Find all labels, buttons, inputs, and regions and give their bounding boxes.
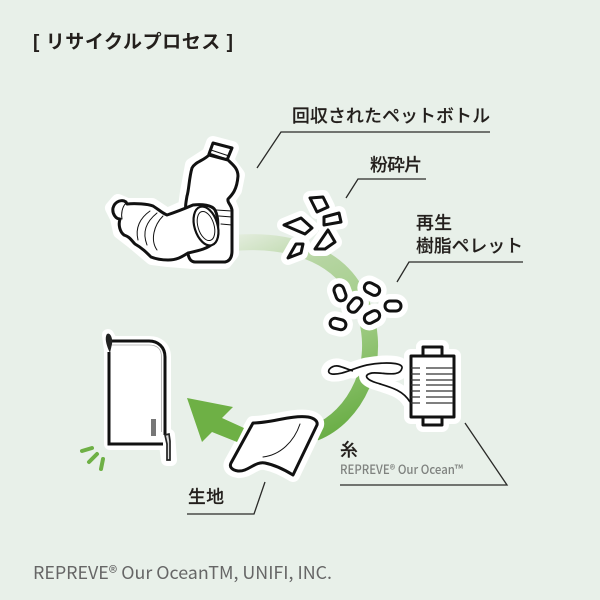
- label: yarn brand: REPREVE® Our Ocean™: [340, 459, 463, 478]
- label: pellets: 樹脂ペレット: [416, 232, 523, 258]
- icon: plastic bottles: [112, 143, 238, 262]
- label: fabric: 生地: [188, 483, 224, 509]
- upright bottle: [186, 143, 238, 262]
- leader line: collected bottles: [257, 132, 490, 168]
- leader line: flakes: [346, 179, 426, 198]
- label: flakes: 粉砕片: [370, 151, 422, 177]
- zipper pull bottom: [165, 434, 170, 460]
- icon: yarn spool: [329, 347, 454, 425]
- icon: pellets: [329, 281, 401, 331]
- pouch body: [109, 341, 165, 444]
- title: [ リサイクルプロセス ]: [33, 31, 233, 53]
- label: pellets: [416, 209, 523, 258]
- icon: fabric: [230, 417, 317, 475]
- leader line: yarn: [340, 423, 507, 485]
- icon: zipper pouch: [106, 334, 171, 460]
- label: yarn: 糸: [340, 436, 358, 462]
- lying bottle: [113, 201, 223, 260]
- recycling ring arrow: [232, 242, 370, 433]
- icon: flakes: [284, 197, 341, 258]
- leader line: fabric: [187, 482, 265, 514]
- leader line: pellets: [397, 262, 523, 282]
- footer credit: REPREVE® Our OceanTM, UNIFI, INC.: [33, 560, 332, 585]
- pouch tag: [151, 419, 156, 436]
- icon: sparkle ticks: [82, 448, 103, 469]
- arrow: to product: [187, 398, 244, 442]
- label: pellets: 再生: [416, 209, 452, 235]
- label: collected bottles: 回収されたペットボトル: [292, 102, 490, 128]
- zipper pull top: [106, 334, 112, 353]
